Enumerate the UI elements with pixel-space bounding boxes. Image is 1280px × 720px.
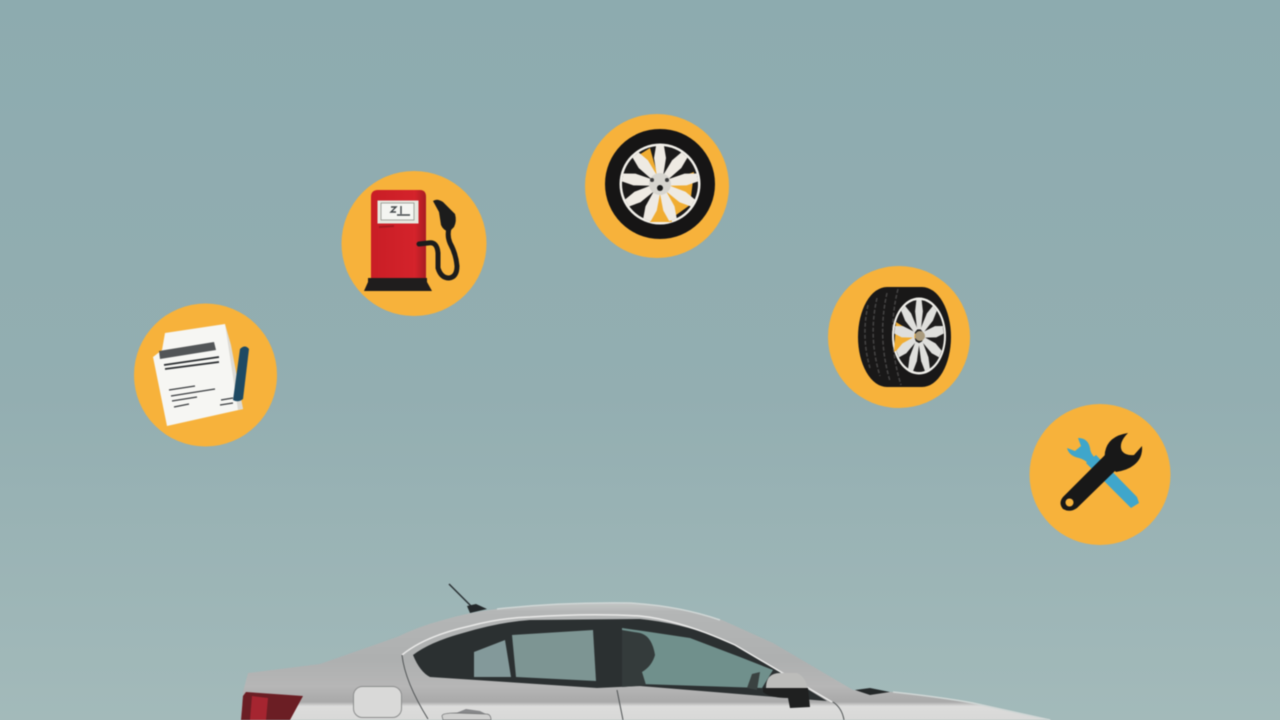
window trim: [402, 615, 832, 702]
driver silhouette: [622, 630, 655, 687]
icon: crossed wrenches: [1030, 404, 1170, 545]
door seams: [402, 655, 844, 720]
door handle: [442, 709, 491, 720]
icon: document and pen: [134, 304, 277, 446]
inner mirror reflection: [747, 672, 760, 690]
icon: fuel pump: [342, 171, 486, 316]
antenna: [449, 584, 487, 613]
fuel door: [354, 686, 402, 718]
icon: alloy wheel front view: [585, 114, 729, 258]
side windows: [413, 619, 827, 701]
front door pane: [622, 628, 773, 688]
car: [241, 584, 1052, 720]
rear quarter pane: [474, 640, 511, 677]
icon: tyre three-quarter view: [828, 266, 970, 408]
car body: [241, 603, 1052, 720]
rear door pane: [512, 630, 596, 681]
wiper: [855, 688, 890, 695]
roof highlight: [497, 603, 1050, 720]
tail light: [241, 692, 303, 720]
mirror: [763, 673, 810, 708]
